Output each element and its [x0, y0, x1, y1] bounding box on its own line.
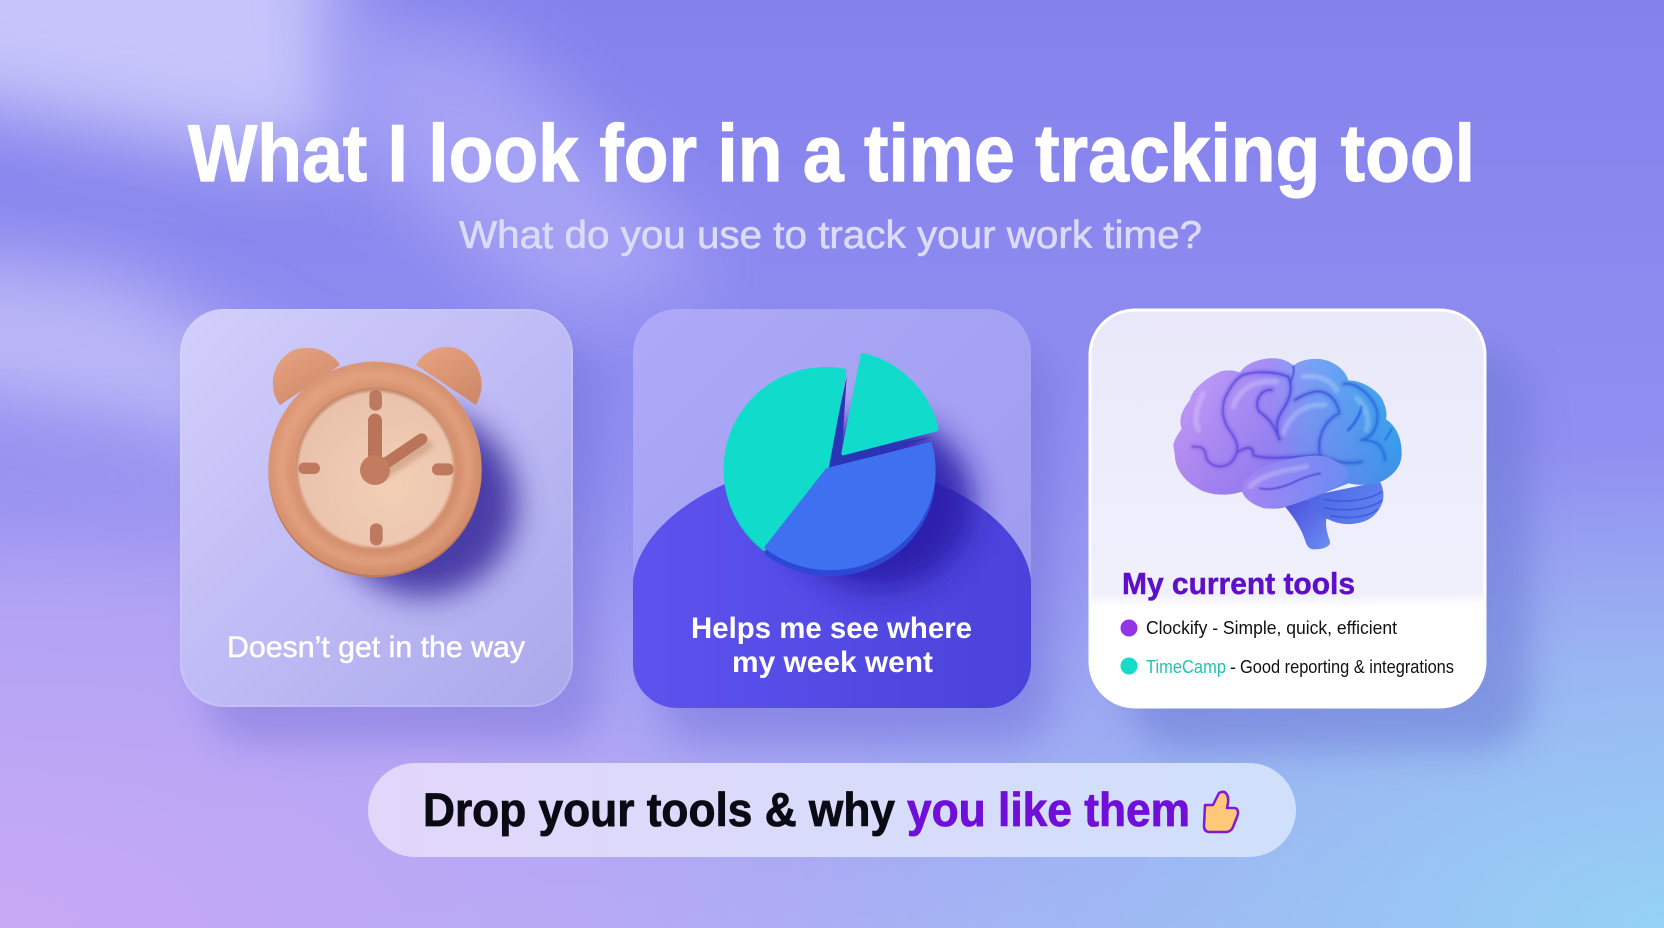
- tool: timecamp: Good reporting & integrations: [1240, 657, 1454, 677]
- icon: pie chart: [726, 355, 973, 590]
- icon: alarm clock: [268, 347, 517, 597]
- brain folds: [1193, 366, 1392, 466]
- call to action pill: Drop your tools & why: [423, 783, 895, 836]
- call to action pill: [368, 763, 1296, 857]
- tool: clockify: Clockify - Simple, quick, efficient: [1146, 618, 1397, 638]
- icon: thumbs up: [1204, 792, 1238, 832]
- call to action pill: you like them: [907, 783, 1190, 836]
- tool: timecamp: TimeCamp: [1146, 657, 1226, 677]
- panel: helps me see where my week went: [633, 309, 1052, 743]
- subtitle: What do you use to track your work time?: [459, 214, 1202, 257]
- label: Doesn’t get in the way: [227, 631, 525, 664]
- brain highlights: [1196, 376, 1368, 487]
- icon: brain: [1173, 358, 1402, 549]
- panel: my current tools: [1080, 309, 1530, 750]
- title: What I look for in a time tracking tool: [188, 109, 1475, 199]
- label: [691, 612, 972, 679]
- heading: My current tools: [1122, 566, 1355, 601]
- tool: timecamp: -: [1230, 657, 1236, 677]
- panel: doesn't get in the way: [180, 309, 598, 743]
- tool: timecamp: [1120, 657, 1454, 677]
- label: Helps me see where: [691, 612, 972, 645]
- label: my week went: [732, 646, 933, 679]
